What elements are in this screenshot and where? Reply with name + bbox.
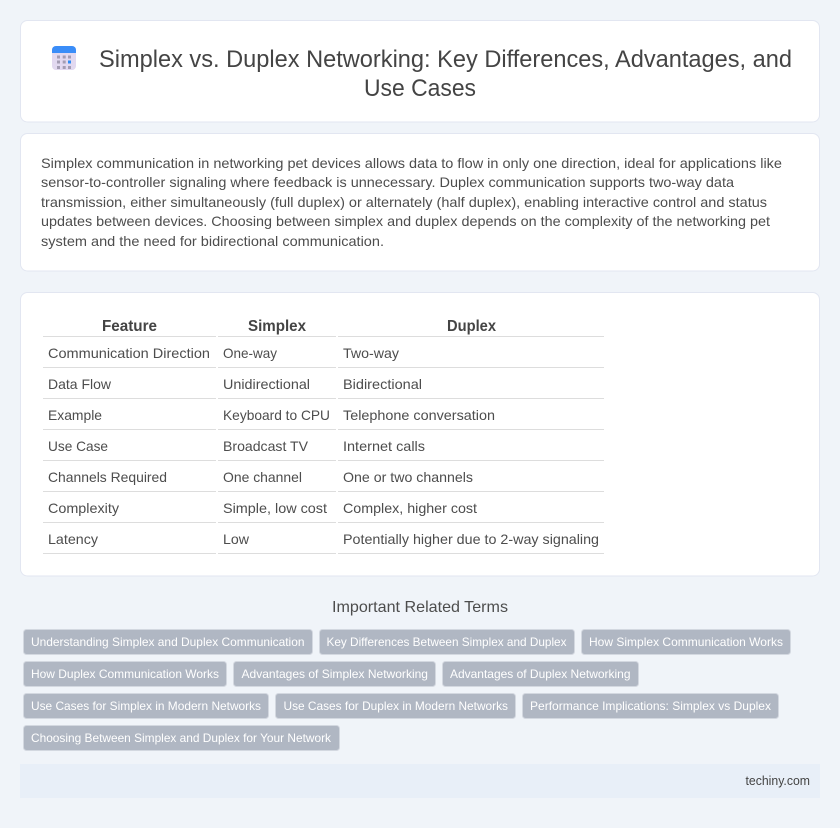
text block: description paragraph <box>41 155 782 249</box>
tag: Use Cases for Simplex in Modern Networks <box>31 699 261 713</box>
text block: description paragraph: updates between devices. Choosing between simplex and duplex depends on the complexity of the networking pet <box>41 213 770 229</box>
text block: description paragraph: sensor-to-controller signaling where feedback is unnecessary. Duplex communication supports two-way data <box>41 174 734 190</box>
table row: use case: Use Case <box>48 438 108 454</box>
table row: latency: Latency <box>48 531 98 547</box>
table header row: Feature <box>102 318 157 335</box>
tag: Advantages of Simplex Networking <box>242 667 428 681</box>
table row: communication direction: One-way <box>223 345 277 361</box>
table row: data flow: Bidirectional <box>343 376 422 392</box>
table row: channels required: Channels Required <box>48 469 167 485</box>
table row: data flow: Unidirectional <box>223 376 310 392</box>
tag: Performance Implications: Simplex vs Duplex <box>530 699 771 713</box>
table row: communication direction: Communication Direction <box>48 345 210 361</box>
table row: example: Keyboard to CPU <box>223 407 330 423</box>
table row: example: Telephone conversation <box>343 407 495 423</box>
table row: complexity: Complexity <box>48 500 119 516</box>
table row: channels required <box>43 469 604 492</box>
table row: latency <box>43 531 604 554</box>
tag: Key Differences Between Simplex and Duplex <box>326 635 566 649</box>
text block: description paragraph: system and the need for bidirectional communication. <box>41 233 384 249</box>
table row: use case: Internet calls <box>343 438 425 454</box>
table row: complexity <box>43 500 604 523</box>
tag <box>522 694 778 718</box>
tag: Use Cases for Duplex in Modern Networks <box>284 699 508 713</box>
tag <box>24 694 268 718</box>
table row: use case <box>43 438 604 461</box>
tag <box>24 726 340 750</box>
table row: latency: Low <box>223 531 250 547</box>
table row: complexity: Simple, low cost <box>223 500 327 516</box>
table row: example: Example <box>48 407 102 423</box>
heading: title <box>99 46 792 102</box>
icon: calendar grid <box>52 46 76 70</box>
tag <box>276 694 516 718</box>
panel: title header <box>20 20 820 122</box>
footer source text: techiny.com <box>746 773 810 788</box>
table row: data flow <box>43 376 604 399</box>
tag <box>320 630 574 654</box>
text block: description paragraph: transmission, either simultaneously (full duplex) or alternately (half duplex), enabling interactive control and status <box>41 194 767 210</box>
table row: use case: Broadcast TV <box>223 438 309 454</box>
tag <box>442 662 638 686</box>
tag <box>24 662 226 686</box>
table row: latency: Potentially higher due to 2-way signaling <box>343 531 599 547</box>
table header row: Simplex <box>248 318 306 335</box>
heading: important related terms: Important Related Terms <box>332 599 508 616</box>
tag <box>234 662 436 686</box>
footer bar <box>20 764 820 798</box>
tag <box>24 630 312 654</box>
table row: channels required: One or two channels <box>343 469 473 485</box>
heading: title: Simplex vs. Duplex Networking: Key Differences, Advantages, and <box>99 46 792 73</box>
table row: communication direction: Two-way <box>343 345 399 361</box>
table row: example <box>43 407 604 430</box>
tag <box>582 630 790 654</box>
table row: communication direction <box>43 345 604 368</box>
table header row: Duplex <box>447 318 496 335</box>
heading: title: Use Cases <box>364 75 476 102</box>
table row: data flow: Data Flow <box>48 376 112 392</box>
table header row <box>43 318 604 337</box>
panel: comparison table <box>20 292 820 576</box>
tag: How Simplex Communication Works <box>589 635 783 649</box>
table row: complexity: Complex, higher cost <box>343 500 477 516</box>
text block: description paragraph: Simplex communication in networking pet devices allows data to flow in only one direction, ideal for applications like <box>41 155 782 171</box>
tag: Understanding Simplex and Duplex Communication <box>31 635 304 649</box>
panel: related term tags <box>24 630 790 750</box>
tag: Choosing Between Simplex and Duplex for Your Network <box>31 731 332 745</box>
table row: channels required: One channel <box>223 469 302 485</box>
panel: introduction <box>20 134 820 271</box>
tag: How Duplex Communication Works <box>31 667 219 681</box>
tag: Advantages of Duplex Networking <box>450 667 630 681</box>
